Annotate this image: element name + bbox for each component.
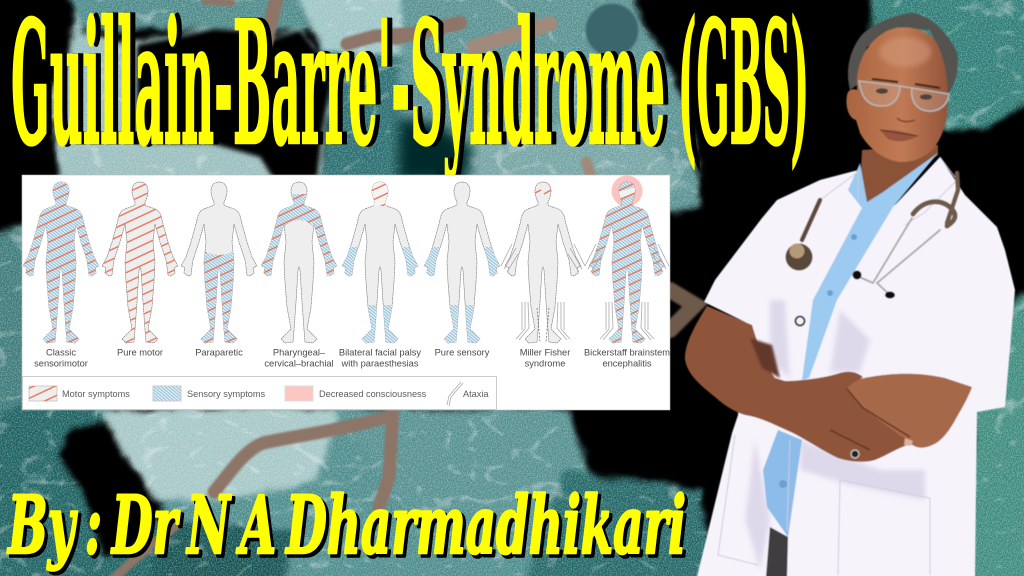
glasses <box>859 81 949 111</box>
legend: motor symptoms: Motor symptoms <box>62 389 130 399</box>
figure captions: Miller Fisher <box>520 348 570 358</box>
stethoscope chest piece <box>786 244 812 270</box>
right forearm <box>847 374 972 448</box>
legend: sensory symptoms: Sensory symptoms <box>187 389 266 399</box>
figure captions: cervical–brachial <box>264 358 334 368</box>
figure captions: Paraparetic <box>195 348 243 358</box>
ataxia lines <box>501 244 585 342</box>
eyebrows <box>872 79 940 88</box>
trousers <box>766 527 788 576</box>
eyes <box>876 88 932 100</box>
figure captions: Bilateral facial palsy <box>339 348 421 358</box>
legend: decreased consciousness: Decreased consciousness <box>319 389 427 399</box>
figure captions: syndrome <box>525 358 565 368</box>
legend <box>22 376 496 410</box>
nose and mouth <box>897 118 915 122</box>
hair <box>848 13 958 96</box>
figure captions <box>34 348 670 368</box>
forehead highlight <box>879 37 931 67</box>
panel: GBS variants body-map diagram <box>21 175 670 410</box>
inner arm shadow <box>750 338 780 378</box>
white coat <box>697 157 1015 576</box>
figure: classic sensorimotor <box>21 180 101 346</box>
figure: pure motor <box>100 180 180 346</box>
arms folded <box>685 306 972 462</box>
figure: Bickerstaff brainstem encephalitis <box>585 176 669 346</box>
figure captions: Pharyngeal– <box>273 348 326 358</box>
stethoscope <box>802 173 958 295</box>
figure: pharyngeal-cervical-brachial <box>259 182 339 343</box>
legend: ataxia <box>447 382 489 406</box>
figure: pure sensory <box>422 182 502 346</box>
figure captions: Pure sensory <box>435 348 490 358</box>
figure captions: Classic <box>46 348 76 358</box>
black void behind the title <box>137 29 331 178</box>
round dark cell <box>585 3 639 57</box>
figure captions: with paraesthesias <box>340 358 419 368</box>
ear tips <box>852 270 895 298</box>
title <box>11 0 814 184</box>
presenter byline <box>7 478 689 575</box>
ring <box>851 450 859 458</box>
coat shadows <box>745 300 925 570</box>
figure: paraparetic <box>181 182 257 346</box>
figure captions: encephalitis <box>602 358 652 368</box>
blue shirt <box>802 153 938 380</box>
figure captions: Bickerstaff brainstem <box>584 348 670 358</box>
figure: bilateral facial palsy with paraesthesias <box>340 180 420 346</box>
legend: motor symptoms <box>29 386 130 401</box>
legend: sensory symptoms <box>153 386 266 401</box>
shirt buttons <box>779 234 857 488</box>
left arm <box>685 306 913 462</box>
figure captions: sensorimotor <box>34 358 88 368</box>
legend: ataxia: Ataxia <box>463 389 489 399</box>
dark gap under the title <box>398 117 473 180</box>
coat lapel lines <box>718 157 957 575</box>
neck <box>860 145 938 202</box>
figure: Miller Fisher syndrome <box>501 182 585 343</box>
doctor portrait <box>685 13 1015 576</box>
face <box>846 27 948 162</box>
brown rod bacteria <box>112 0 695 576</box>
coat buttonhole and shirt button <box>796 316 804 326</box>
legend: decreased consciousness <box>285 386 427 401</box>
figure captions: Pure motor <box>117 348 163 358</box>
